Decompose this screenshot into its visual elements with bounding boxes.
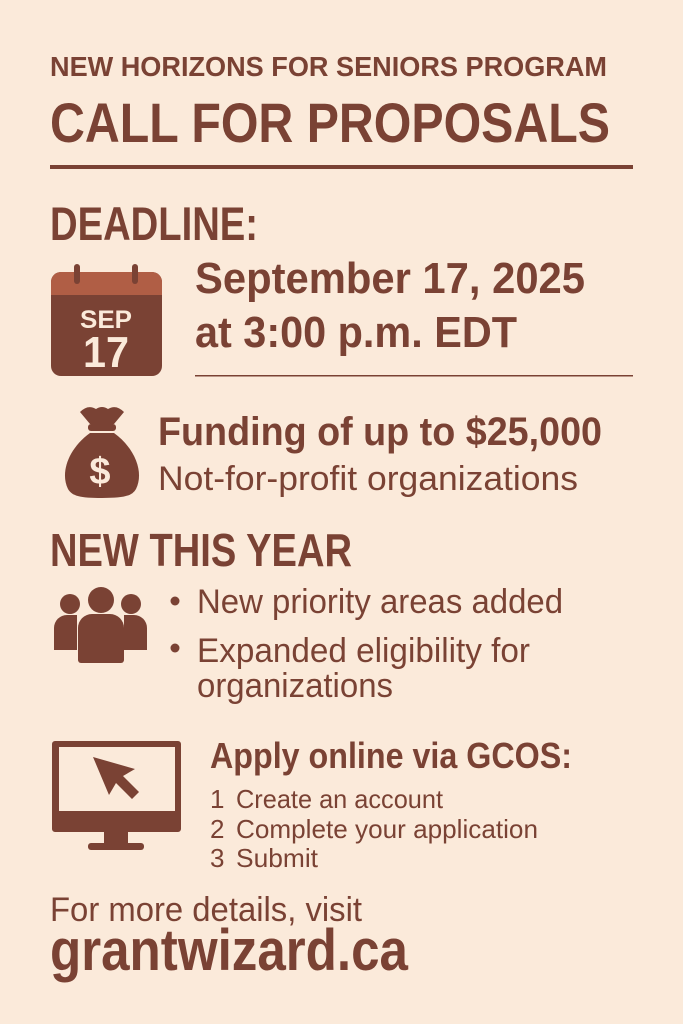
apply online: Create an account bbox=[236, 784, 444, 814]
icon: computer monitor bbox=[52, 741, 181, 850]
icon: people bbox=[54, 587, 147, 663]
bullet list: New priority areas added bbox=[197, 583, 563, 621]
icon: money bag bbox=[65, 407, 139, 498]
deadline date: September 17, 2025 bbox=[195, 254, 585, 303]
bullet list bbox=[170, 583, 563, 705]
footer: For more details, visit bbox=[50, 891, 363, 929]
funding text: Funding of up to $25,000 bbox=[158, 410, 602, 454]
deadline date: at 3:00 p.m. EDT bbox=[195, 308, 517, 357]
footer: grantwizard.ca bbox=[50, 918, 409, 983]
apply online: 3 bbox=[210, 843, 224, 873]
icon: money bag: $ bbox=[89, 451, 111, 493]
icon: calendar bbox=[51, 264, 162, 377]
funding text bbox=[158, 410, 602, 498]
icon: calendar: 17 bbox=[83, 328, 129, 377]
footer bbox=[50, 891, 409, 983]
bullet list: Expanded eligibility for bbox=[197, 632, 530, 670]
funding text: Not-for-profit organizations bbox=[158, 460, 578, 498]
apply online: 2 bbox=[210, 814, 224, 844]
icon: calendar: SEP bbox=[80, 306, 132, 334]
heading: new this year: NEW THIS YEAR bbox=[50, 524, 352, 576]
subtitle: NEW HORIZONS FOR SENIORS PROGRAM bbox=[50, 51, 607, 82]
deadline date bbox=[195, 254, 585, 357]
heading: deadline: DEADLINE: bbox=[50, 197, 258, 250]
bullet list: organizations bbox=[197, 667, 393, 705]
apply online: Complete your application bbox=[236, 814, 538, 844]
title: CALL FOR PROPOSALS bbox=[50, 91, 610, 154]
apply online bbox=[210, 735, 572, 873]
apply online: Apply online via GCOS: bbox=[210, 735, 572, 776]
apply online: Submit bbox=[236, 843, 319, 873]
apply online: 1 bbox=[210, 784, 224, 814]
